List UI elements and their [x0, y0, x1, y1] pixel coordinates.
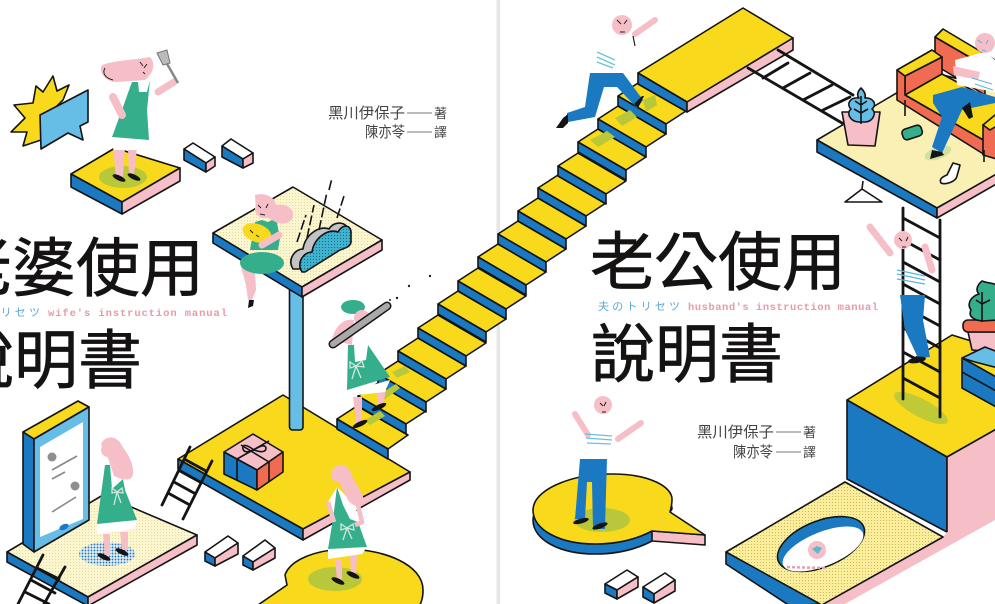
icon: storm cloud	[291, 223, 351, 272]
icon: sofa	[897, 29, 995, 162]
icon: gift box	[224, 434, 283, 490]
author credit right: 譯	[803, 445, 816, 460]
icon: hanger	[845, 181, 882, 202]
shadow under woman	[99, 166, 147, 188]
panel: cream platform with cloud	[213, 178, 382, 297]
book spine gap	[496, 0, 500, 604]
title right second line: 說明書	[591, 319, 783, 391]
yellow bubble platform left	[258, 549, 423, 604]
subtitle right: husband's instruction manual	[688, 302, 878, 314]
hole with peeking face	[770, 505, 872, 583]
subtitle left: wife's instruction manual	[48, 308, 227, 320]
icon: giant phone	[23, 401, 89, 552]
woman with rolling pin	[332, 300, 390, 430]
man falling on stairs	[556, 15, 655, 128]
shadow under ladder	[890, 386, 952, 430]
rain lines	[297, 178, 344, 242]
title right: 老公使用	[590, 227, 846, 299]
icon: green plant right	[963, 281, 995, 352]
icon: sock	[940, 163, 960, 184]
shoe shadows on stairs	[365, 95, 657, 425]
woman seated with baby	[240, 194, 293, 308]
panel: speech bubble platform right	[533, 396, 705, 554]
ladder: vertical right	[903, 208, 940, 417]
subtitle right	[598, 300, 878, 314]
icon: blue speech bubble	[40, 90, 88, 149]
panel: big yellow platform	[178, 395, 410, 540]
man shrugging	[573, 396, 641, 531]
author credit left: 著	[434, 106, 447, 121]
author credit left	[328, 105, 447, 141]
panel: phone platform	[7, 401, 197, 604]
author credit right: 黑川伊保子	[697, 424, 774, 441]
woman looking at phone	[97, 437, 137, 562]
pole under cream platform	[290, 280, 303, 430]
subtitle left	[0, 306, 227, 320]
woman with spatula	[101, 50, 178, 183]
top long platform	[638, 8, 793, 112]
ladder: horizontal under top platform	[748, 50, 853, 123]
ladder: middle left	[162, 447, 212, 519]
left page small bricks top	[184, 139, 253, 172]
shadow under man	[574, 508, 630, 532]
author credit right	[697, 424, 816, 461]
staircase	[337, 83, 686, 459]
subtitle right: 夫のトリセツ	[598, 300, 680, 313]
author credit right: 陳亦苓	[733, 444, 773, 461]
panel: block and floor	[726, 335, 995, 604]
icon: toolbox	[962, 347, 995, 408]
author credit left: 譯	[434, 125, 447, 140]
man climbing ladder	[870, 227, 932, 365]
icon: can	[901, 124, 923, 141]
panel: living room platform	[817, 29, 995, 218]
woman with hands on hips	[308, 465, 367, 591]
dotted shadow	[79, 542, 135, 566]
author credit left: 黑川伊保子	[328, 105, 405, 122]
flying dots	[389, 275, 431, 301]
panel: left page top platform with woman	[11, 50, 180, 214]
author credit right: 著	[803, 425, 816, 440]
dotted floor	[726, 482, 943, 604]
icon: spiky star	[11, 76, 69, 146]
author credit left: 陳亦苓	[365, 124, 405, 141]
man on sofa	[923, 33, 995, 163]
ladder: bottom left	[18, 555, 65, 604]
bricks bottom right	[605, 570, 675, 603]
icon: potted plant	[842, 88, 880, 146]
bricks bottom left	[205, 536, 275, 570]
